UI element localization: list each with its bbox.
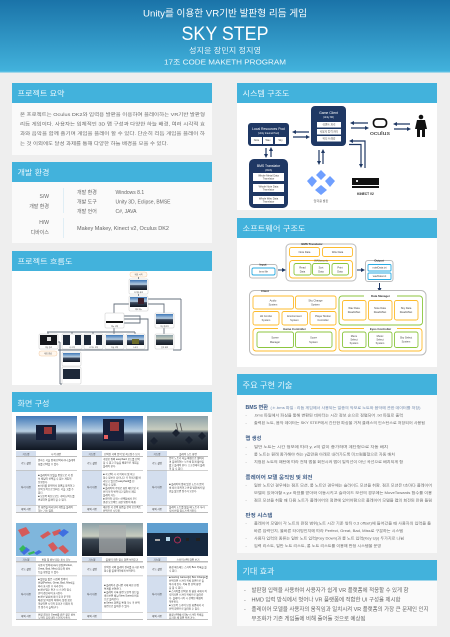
BMS translator module: Wav Data — [332, 250, 344, 254]
screen: sky select: 선택 화면으로 돌아갈 수 있다. — [169, 606, 200, 610]
screen: music select: 예외 사항 — [87, 507, 98, 511]
screen: gameplay: 에 따라 움직이고 판정 범위에서 발 — [169, 486, 205, 490]
environment table: Unity 3D, Eclipse, BMSE — [116, 200, 171, 206]
screen: music select: 점수 정보가 나타나고 곡 이미지를 바 — [103, 476, 142, 480]
screen: results: 통계를 보여준다. — [104, 586, 122, 590]
local resources pool block: Local Resources Pool — [252, 127, 285, 131]
screen: results: 플레이 최종 점수 화면 보여주기 — [106, 558, 138, 562]
player model motion: 플레이어 모델 움직임 및 회전 — [246, 473, 313, 481]
screen: sky collection: 누적이 유지되어 스코어가 증가. — [38, 616, 71, 620]
icon: input pad: 입력용 발판 — [314, 198, 329, 203]
local resources pool block: Sky — [278, 138, 283, 142]
output module: wavData.txt — [373, 274, 387, 278]
BMS translator module: Data — [337, 270, 343, 274]
client module: Sky Data — [401, 306, 412, 310]
screen: results — [82, 523, 145, 620]
screen: sky collection: 판정(Perfect, Great, Bad, Miss)을 — [38, 580, 75, 584]
screen: start — [16, 416, 77, 513]
client module: Game Controller — [283, 327, 307, 331]
screen: sky collection: 기능명 — [23, 558, 29, 562]
judgement system: 플레이어 모델이 각 노트의 판정 범위(노트 시간 기준 앞뒤 0.3 offset)에 들어갔을 때 사용자의 입력을 올 — [254, 520, 432, 526]
input module: bms file — [259, 270, 269, 274]
BMS conversion: .bms 파일에서 파싱을 통해 변환된 데이터는 시간 정보 순으로 정렬되어 .txt 파일로 출력 — [254, 412, 403, 418]
icon: person — [415, 115, 427, 137]
software arrows — [278, 268, 382, 292]
screen: start: 화를 선택할 수 있다. — [38, 462, 59, 466]
screen: sky collection: Great, Bad, Miss) 점수와 콤보 — [38, 566, 71, 570]
screen: sky select: 스카이 선택 화면 보기 — [177, 558, 199, 562]
client module: Player Motion — [315, 314, 331, 318]
game client block: Game Client — [319, 111, 338, 115]
screen: music select: 선택으로 시도함. — [103, 508, 121, 512]
flow thumbnail labels: 메뉴 선택 — [111, 324, 118, 328]
screen: results: 바라보면 메뉴(View Sorted) 버튼 — [104, 594, 140, 598]
screen: start: 보 패널이 선택을 수 있는 게임이 — [38, 476, 71, 480]
local resources pool block: Wav — [265, 138, 271, 142]
client module: Select — [350, 338, 358, 342]
heading: 기대 효과 — [242, 567, 275, 576]
BMS translator module: Read — [299, 266, 306, 270]
panel: software architecture — [237, 218, 437, 367]
effects list: - — [244, 588, 246, 594]
client module: Environment — [287, 314, 302, 318]
client module: ReadAlSet — [374, 310, 386, 314]
screen: start: 기능명 — [23, 452, 29, 456]
judgement system: - — [246, 522, 248, 526]
environment table: H/W — [39, 220, 49, 226]
local resources pool block: (Unity Internal Pool) — [258, 132, 279, 135]
start and end pills: 게임 종료 — [44, 352, 52, 356]
screen: results: 기능명 — [89, 558, 95, 562]
screen: gameplay: ■ 플레이어 앞에 있던 노트가 음악 — [169, 482, 205, 486]
screen: sky collection: 기능 설명 — [21, 567, 31, 571]
screen: sky collection: 이상이면 시각적 효과가 더해져 최 — [38, 602, 73, 606]
heading: 시스템 구조도 — [242, 89, 290, 98]
client module — [250, 289, 426, 355]
client module: Controller — [317, 318, 329, 322]
local resources pool block: Note — [254, 138, 260, 142]
screen: sky collection: ■ 발판을 밟은 시점의 입력이 — [38, 577, 68, 581]
BMS translator module: Print — [337, 266, 343, 270]
BMS conversion: BMS 변환 — [246, 403, 268, 411]
effects list: - — [244, 598, 246, 604]
effects list: HMD 입력 방식에서 벗어나 VR 플랫폼에 적합한 UI 구성을 제시함 — [252, 596, 401, 604]
environment table: 개발 환경 — [29, 203, 49, 210]
client module: Scene — [271, 336, 279, 340]
screen: gameplay: 판을 밟으면 점수가 오른다. — [169, 489, 197, 493]
panel: expected effects — [237, 560, 437, 626]
screen: gameplay: 플레이 노트를 밟을 때 노트가 사라 — [169, 505, 205, 509]
game client block: 비디 트래킹 — [323, 136, 336, 140]
environment table: Windows 8.1 — [116, 190, 144, 196]
summary text: 는 것 이외에도 달성 과제를 통해 다양한 하늘 배경을 모을 수 있다. — [20, 140, 168, 147]
client module: Data Manager — [371, 294, 391, 298]
flow thumbnail labels: 게임 플레이 — [160, 324, 169, 328]
screen: start: 예외 사항 — [21, 507, 32, 511]
screen: gameplay: 기능 설명 — [152, 461, 162, 465]
icon: oculus — [370, 119, 390, 137]
player model motion — [246, 473, 433, 502]
screen: results: ■ 플레이 기록 화면 오른쪽 상단을 — [104, 590, 140, 594]
effects list: 부조화가 기존 게임들에 비해 줄어들 것으로 예상됨 — [252, 614, 366, 622]
panel: key implementation techniques — [237, 374, 437, 553]
BMS translator block: Whole Metal Data — [258, 174, 279, 178]
client module: System — [290, 318, 299, 322]
screen: sky select: 을 볼 수 있다. — [169, 586, 184, 590]
screen: start: 변경하여 플레이 할 수 있다. — [38, 498, 67, 502]
screen: gameplay: 플레이 노트 화면 — [179, 452, 197, 456]
screen: gameplay: 밟고 플레이 한다. 스크린에서 플레 — [169, 463, 205, 467]
judgement system: 판정 시스템 — [246, 511, 273, 519]
heading: 주요 구현 기술 — [242, 380, 292, 390]
client module: System — [376, 341, 384, 345]
BMS translator block: Whole Note Data — [259, 184, 279, 188]
team name: 17조 CODE MAKETH PROGRAM — [164, 58, 286, 66]
team members: 성지윤 장민지 정지영 — [189, 45, 261, 55]
flow thumbnail labels: 하늘 선택 — [111, 345, 118, 349]
screen: sky collection: ■ 콤보/점수 증가 시 스코어 점수 — [38, 588, 72, 592]
screen: sky select: 처리 내용 — [152, 592, 163, 596]
screen: gameplay: 처리 내용 — [152, 485, 163, 489]
flow thumbnail labels: 곡 선택 — [69, 345, 75, 349]
screen: sky select: 선택하면 스카이 목록 화면으로 들 — [169, 578, 205, 582]
screen: results: 화면으로 돌아갈 수 있다. — [104, 604, 130, 608]
screen: gameplay: 지며 판정 점수가 증가한다. — [169, 508, 197, 512]
client module: Hit Combo — [260, 314, 273, 318]
screen: gameplay: 음악 노트가 하늘 배경으로 떨어지 — [169, 456, 204, 460]
screen: results: ■ Select 화면을 통해 다시 곡 선택 — [104, 600, 140, 604]
effects list: 발판형 입력을 사용하여 사용자가 쉽게 VR 플랫폼에 적응할 수 있게 함 — [252, 586, 409, 594]
flow thumbnail labels: 결과 화면 — [161, 345, 168, 349]
screen: start: 하는 기능 있음. — [38, 508, 54, 512]
BMS translator block: (JAVA) — [265, 169, 272, 172]
screen: start: ■ 오른쪽 버튼으로는 곡의 난이도를 — [38, 494, 75, 498]
client module: Manager — [270, 340, 280, 344]
BMS translator module: Data — [318, 270, 324, 274]
screen: sky select: 유지한 채 화면 복귀 가능. — [169, 616, 196, 620]
effects list: 플레이어 모델을 사용자의 움직임과 일치시켜 VR 플랫폼의 가장 큰 문제인 인지 — [252, 605, 429, 613]
BMS translator module: Note Data — [299, 250, 311, 254]
heading: 프로젝트 요약 — [18, 89, 65, 98]
screen: results: 기능 설명 — [87, 567, 97, 571]
player model motion: 점프 모션을 취할 때 다음 노트가 플레이어의 정면에 있어야함으로 플레이어 모델을 맵의 회전된 만큼 돌림 — [254, 498, 432, 502]
summary text: 본 프로젝트는 Oculus DK2와 입력용 발판을 이용하여 플레이하는 VR기반 발판형 — [20, 111, 205, 118]
input module: Input — [259, 262, 267, 266]
screen: sky collection — [16, 523, 77, 620]
BMS translator module — [286, 242, 356, 281]
screen: music select: 곡정보 위의 easy/hard 모드를 선택 — [103, 457, 140, 461]
BMS translator module: BMS Translator — [301, 242, 323, 246]
screen: sky collection: ■ 콤보 달성에 따라 효과 문구와 — [38, 594, 71, 598]
client module: Menu — [351, 334, 358, 338]
map generation — [246, 434, 404, 464]
screen: sky collection: 배경 및 색상이 바뀌며, 일정 콤보 — [38, 598, 73, 602]
local resources pool block — [248, 123, 289, 146]
flow thumbnail labels: 메인 메뉴 — [135, 307, 142, 311]
screen: sky select — [147, 523, 209, 620]
game client block: (Unity 3D) — [323, 116, 334, 119]
screen: music select: 할 수 있고 하늘을 배경으로 게임을 — [103, 460, 139, 464]
screen: sky collection: 처리 내용 — [21, 592, 32, 596]
environment table: 개발 언어 — [77, 208, 97, 215]
start and end pills — [39, 272, 147, 356]
client module: System — [311, 302, 320, 306]
BMS translator block: BMS Translator — [257, 164, 281, 168]
map generation: 롱 노트는 원래 증가해야 하는 y값만큼 아래로 내려가도록 미끄럼틀형으로 자동 배치 — [254, 452, 395, 456]
panel: project flow — [12, 251, 212, 385]
screen: start: 원하는 곡을 함께 선택하거나 플레이 — [38, 458, 75, 462]
map generation: - — [246, 452, 248, 456]
screen: music select — [82, 416, 143, 513]
client module: Note Data — [374, 306, 386, 310]
effects list — [244, 586, 429, 622]
game client block: 이벤트 처리 — [323, 122, 336, 126]
screen: music select: ■ 음악이 나오는 선택창에서 모드 — [103, 496, 138, 500]
heading: 소프트웨어 구조도 — [242, 224, 306, 233]
screen: music select: 플레이 한다. — [103, 464, 116, 468]
BMS conversion: 출력된 노트, 음악 데이터는 SKY STEP에서 간단한 파싱을 거쳐 클래스의 인스턴스로 저장되어 사용됨 — [254, 420, 425, 425]
client module: System — [402, 340, 410, 344]
effects list: - — [244, 607, 246, 613]
judgement system: - — [246, 544, 248, 548]
summary text: 리듬 게임이다. 사용자는 입체적인 3D 맵 구성과 다양한 하늘 배경, 여러 시각적 효 — [20, 120, 205, 128]
screen: sky select: ■ Gazing Game에서 Box Change를 — [169, 575, 209, 579]
BMS translator module: Sort — [319, 266, 324, 270]
screen: results: 선택된 곡의 플레이 결과를 표시한 최종 — [104, 565, 145, 569]
judgement system: 바른 입력인지, 올바른 타이밍인지에 따라 Perfect, Great, Bad, Miss로 구분하는 시스템 — [254, 528, 403, 533]
screen: music select: 선이 동작 반복되고 있어서 게임 — [103, 490, 136, 494]
screen: music select: 처리 내용 — [87, 485, 98, 489]
panel: system architecture — [237, 83, 437, 210]
screen: sky collection: 판이 갱신되어 표시된다. — [38, 591, 63, 595]
start and end pills: 게임 시작 — [135, 272, 143, 276]
subtitle: Unity를 이용한 VR기반 발판형 리듬 게임 — [143, 8, 307, 18]
screen: sky select: 기능명 — [154, 558, 160, 562]
screen: music select: 라보고 있으면 easy/hard를 선 — [103, 479, 135, 483]
player model motion: - — [246, 498, 248, 502]
screen: music select: ■ 플레이어 주위로 회전 패턴 및 곡 — [103, 486, 139, 490]
client module: System — [309, 340, 318, 344]
screen: start: 선택 동작으로 원하는 곡을 고를 수 — [38, 487, 74, 491]
screen: sky select: ■ 스카이를 선택한 뒤 달성 과제가 이 — [169, 589, 207, 593]
screen: start: 처리 내용 — [21, 485, 32, 489]
screen: results: 으로 돌아간다. — [104, 597, 119, 601]
client module: System — [350, 341, 358, 345]
BMS conversion — [246, 403, 425, 425]
BMS translator module: Data — [300, 270, 306, 274]
game client block — [311, 106, 346, 146]
flow chart — [39, 272, 181, 384]
screen: start: 기능 설명 — [21, 461, 31, 465]
environment table: S/W — [40, 194, 49, 200]
screen: music select: ■ 곡 선택 시 곡 이미지 및 최고 — [103, 472, 135, 476]
BMS translator module: WAVassorty — [314, 258, 329, 262]
client module: System — [269, 302, 277, 306]
screen: sky select: 예외 사항 — [152, 614, 163, 618]
title: SKY STEP — [182, 23, 268, 45]
client module: Sky Select — [400, 336, 412, 340]
BMS conversion: (＊.bms 파일 : 리듬 게임에서 사용되는 일종의 악보로 노트와 음악에 관한 데이터를 저장) — [270, 405, 420, 410]
player model motion: 일반 노트인 경우에는 점프 모션, 롱 노트인 경우에는 슬라이드 모션을 취함. 점프 모션은 t초마다 플레이어 — [254, 482, 432, 488]
screen: start: 전 화면을 바라보며 게임을 플레이 — [38, 505, 73, 509]
screen: music select: 제한된 곡 선택 화면을 전역 오브젝트 — [103, 505, 142, 509]
icon: kinect — [352, 178, 379, 196]
flow thumbnail labels: 스코어 — [133, 345, 138, 349]
flow thumbnail labels: 게임 종료 — [45, 345, 52, 349]
screen: start: ■ 플레이어 모델을 중심으로 곡 정 — [38, 473, 73, 477]
BMS translator block — [249, 159, 288, 208]
player model motion: 모델이 있어야할 x,y,z 좌표를 받아와 이동시키고 슬라이드 모션의 경우에는 MoveTowards 함수를 이용 — [254, 490, 433, 495]
screen: music select: 기능 설명 — [87, 461, 97, 465]
BMS conversion: - — [246, 421, 248, 425]
client module: ReadAlSet — [348, 310, 360, 314]
client module: Score — [310, 336, 317, 340]
judgement system — [246, 511, 432, 548]
client module: ReadAlSet — [400, 310, 412, 314]
screen: sky select: ■ 오른쪽 스카이 보상 화면에서 곡 — [169, 603, 205, 607]
screen: sky select: 수 있다. — [169, 568, 178, 572]
screen: sky collection: 종 점수가 늘어난다. — [38, 605, 59, 609]
client module: Eyes Controller — [370, 327, 392, 331]
flow thumbnail labels: 난이도 선택 — [89, 345, 98, 349]
client module: Sky Change — [308, 298, 323, 302]
screen: gameplay — [147, 416, 208, 513]
screen: sky select: 다. 플레이 시작 시 선택된 배경이 — [169, 596, 203, 600]
judgement system: - — [246, 536, 248, 540]
judgement system: 사용자 입력의 종류는 일반 노트 입력(Key Down)과 롱 노트 입력(Key Up) 두가지로 나뉨 — [254, 536, 404, 540]
screen: start: 있다. — [38, 490, 44, 494]
screen: music select: 기능명 — [89, 452, 95, 456]
icon: input pad — [307, 170, 335, 203]
screen: gameplay: 기능명 — [154, 452, 160, 456]
screen: results: ■ 플레이가 끝나면 곡에 따른 판정 — [104, 583, 139, 587]
screen: sky collection: 등을 확인할 수 있다. — [38, 570, 59, 574]
environment table — [29, 188, 171, 238]
icon: oculus: oculus — [370, 131, 390, 137]
flow thumbnail labels — [45, 290, 169, 349]
output module — [366, 258, 393, 282]
screen: results: 처리 내용 — [87, 592, 98, 596]
player model motion: - — [246, 484, 248, 488]
screen: results: 예외 사항 — [87, 614, 98, 618]
screen: start: 진행된다. — [38, 480, 48, 484]
screen: gameplay: 이 할 수 있다. — [169, 466, 184, 470]
output module: noteData.txt — [372, 266, 387, 270]
map generation: - — [246, 445, 248, 449]
heading: 프로젝트 흐름도 — [18, 257, 73, 266]
BMS translator block: Translator — [263, 188, 274, 192]
map generation: 지정된 노트의 패턴에 따라 전체 맵을 회전시켜 맵이 일직선이 아닌 곡선으로 배치되게 함 — [254, 459, 404, 464]
summary text — [20, 111, 206, 147]
screen: music select: 플레이 가능. — [103, 493, 116, 497]
summary text: 과와 음악을 함께 즐기며 게임을 플레이 할 수 있다. 단순히 리듬 게임을 플레이 하 — [20, 130, 206, 137]
environment table: Makey Makey, Kinect v2, Oculus DK2 — [77, 226, 169, 232]
BMS translator block: Whole Wav Data — [259, 196, 279, 200]
screen: music select: 변경 오브젝트 회전 방향이 바뀜. — [103, 500, 137, 504]
screen: music select: 택할 수 있음. — [103, 482, 117, 486]
screen: sky select: 루어지면 스카이 목록으로 돌아간 — [169, 592, 204, 596]
header banner — [0, 0, 450, 72]
BMS translator block: Translator — [263, 200, 274, 204]
client module: Wav Data — [348, 306, 360, 310]
screen: sky select: 적용된다. — [169, 600, 179, 604]
input module — [250, 262, 277, 278]
screen: gameplay: 며 플레이어는 노트에 맞게 발판을 — [169, 460, 205, 464]
screen: gameplay: 예외 사항 — [152, 507, 163, 511]
environment table: 디바이스 — [31, 229, 49, 236]
map generation: 맵 생성 — [246, 434, 261, 442]
heading: 화면 구성 — [18, 399, 50, 408]
screen: sky select: 어가게 된다. 목록 중 선택 화면 — [169, 582, 201, 586]
client module: Client — [261, 289, 269, 293]
client module: Music — [377, 334, 384, 338]
screen: sky select: 기능 설명 — [152, 567, 162, 571]
judgement system: 입력 리스트, 일반 노트 리스트, 롱 노트 리스트를 이용해 판정 시스템을 운영 — [254, 543, 381, 548]
BMS translator block: Translator — [263, 176, 274, 180]
environment table: 개발 환경 — [77, 189, 97, 196]
environment table: C#, JAVA — [116, 209, 137, 215]
output module: Output — [374, 258, 384, 262]
screen: sky collection: 따라 표시된 후 사라진다. — [38, 584, 64, 588]
game client block: 사용자 입력 처리 — [320, 130, 339, 134]
client module: Audio — [270, 298, 277, 302]
screen: sky collection: 예외 사항 — [21, 614, 32, 618]
client module: System — [262, 318, 270, 322]
screen: music select: 선택된 곡의 음악 및 최고점수 보기 — [104, 452, 140, 456]
system arrows — [264, 121, 411, 168]
client module: Select — [376, 338, 384, 342]
BMS conversion: - — [246, 414, 248, 418]
icon: kinect: KINECT V2 — [357, 192, 374, 196]
panel: development environment — [12, 162, 212, 243]
screen: results: 점수를 플레이어에게 보여준다. — [104, 568, 136, 572]
panel: project summary — [12, 83, 212, 155]
heading: 개발 환경 — [18, 168, 50, 177]
screen: sky select: 환경 선택에서 Sky 스카이 목록을 — [169, 612, 204, 616]
screen: start: ■ 머리를 움직여서 화면을 움직이고 — [38, 484, 75, 488]
screen: sky select: 환경 메뉴에는 스카이 Box 목록을 볼 — [169, 565, 207, 569]
environment table: 개발 도구 — [77, 198, 97, 206]
screen: sky collection: 사용자 입력에 따라 판정(Perfect, — [38, 563, 73, 567]
screen: start: 시작 화면 — [51, 452, 62, 456]
map generation: - — [246, 460, 248, 464]
screen: sky collection: 판정 결과가 Great를 받은 경우 콤보 — [38, 612, 76, 616]
panel: screen composition — [12, 392, 212, 626]
screen: sky collection: 판정 및 콤보 점수 표시 기능 — [42, 558, 71, 562]
map generation: 일반 노트는 시간 정보에 따라 y, z의 값이 증가하며 계단형으로 자동 배치 — [254, 444, 388, 449]
flow thumbnail labels: 타이틀 화면 — [134, 290, 143, 294]
